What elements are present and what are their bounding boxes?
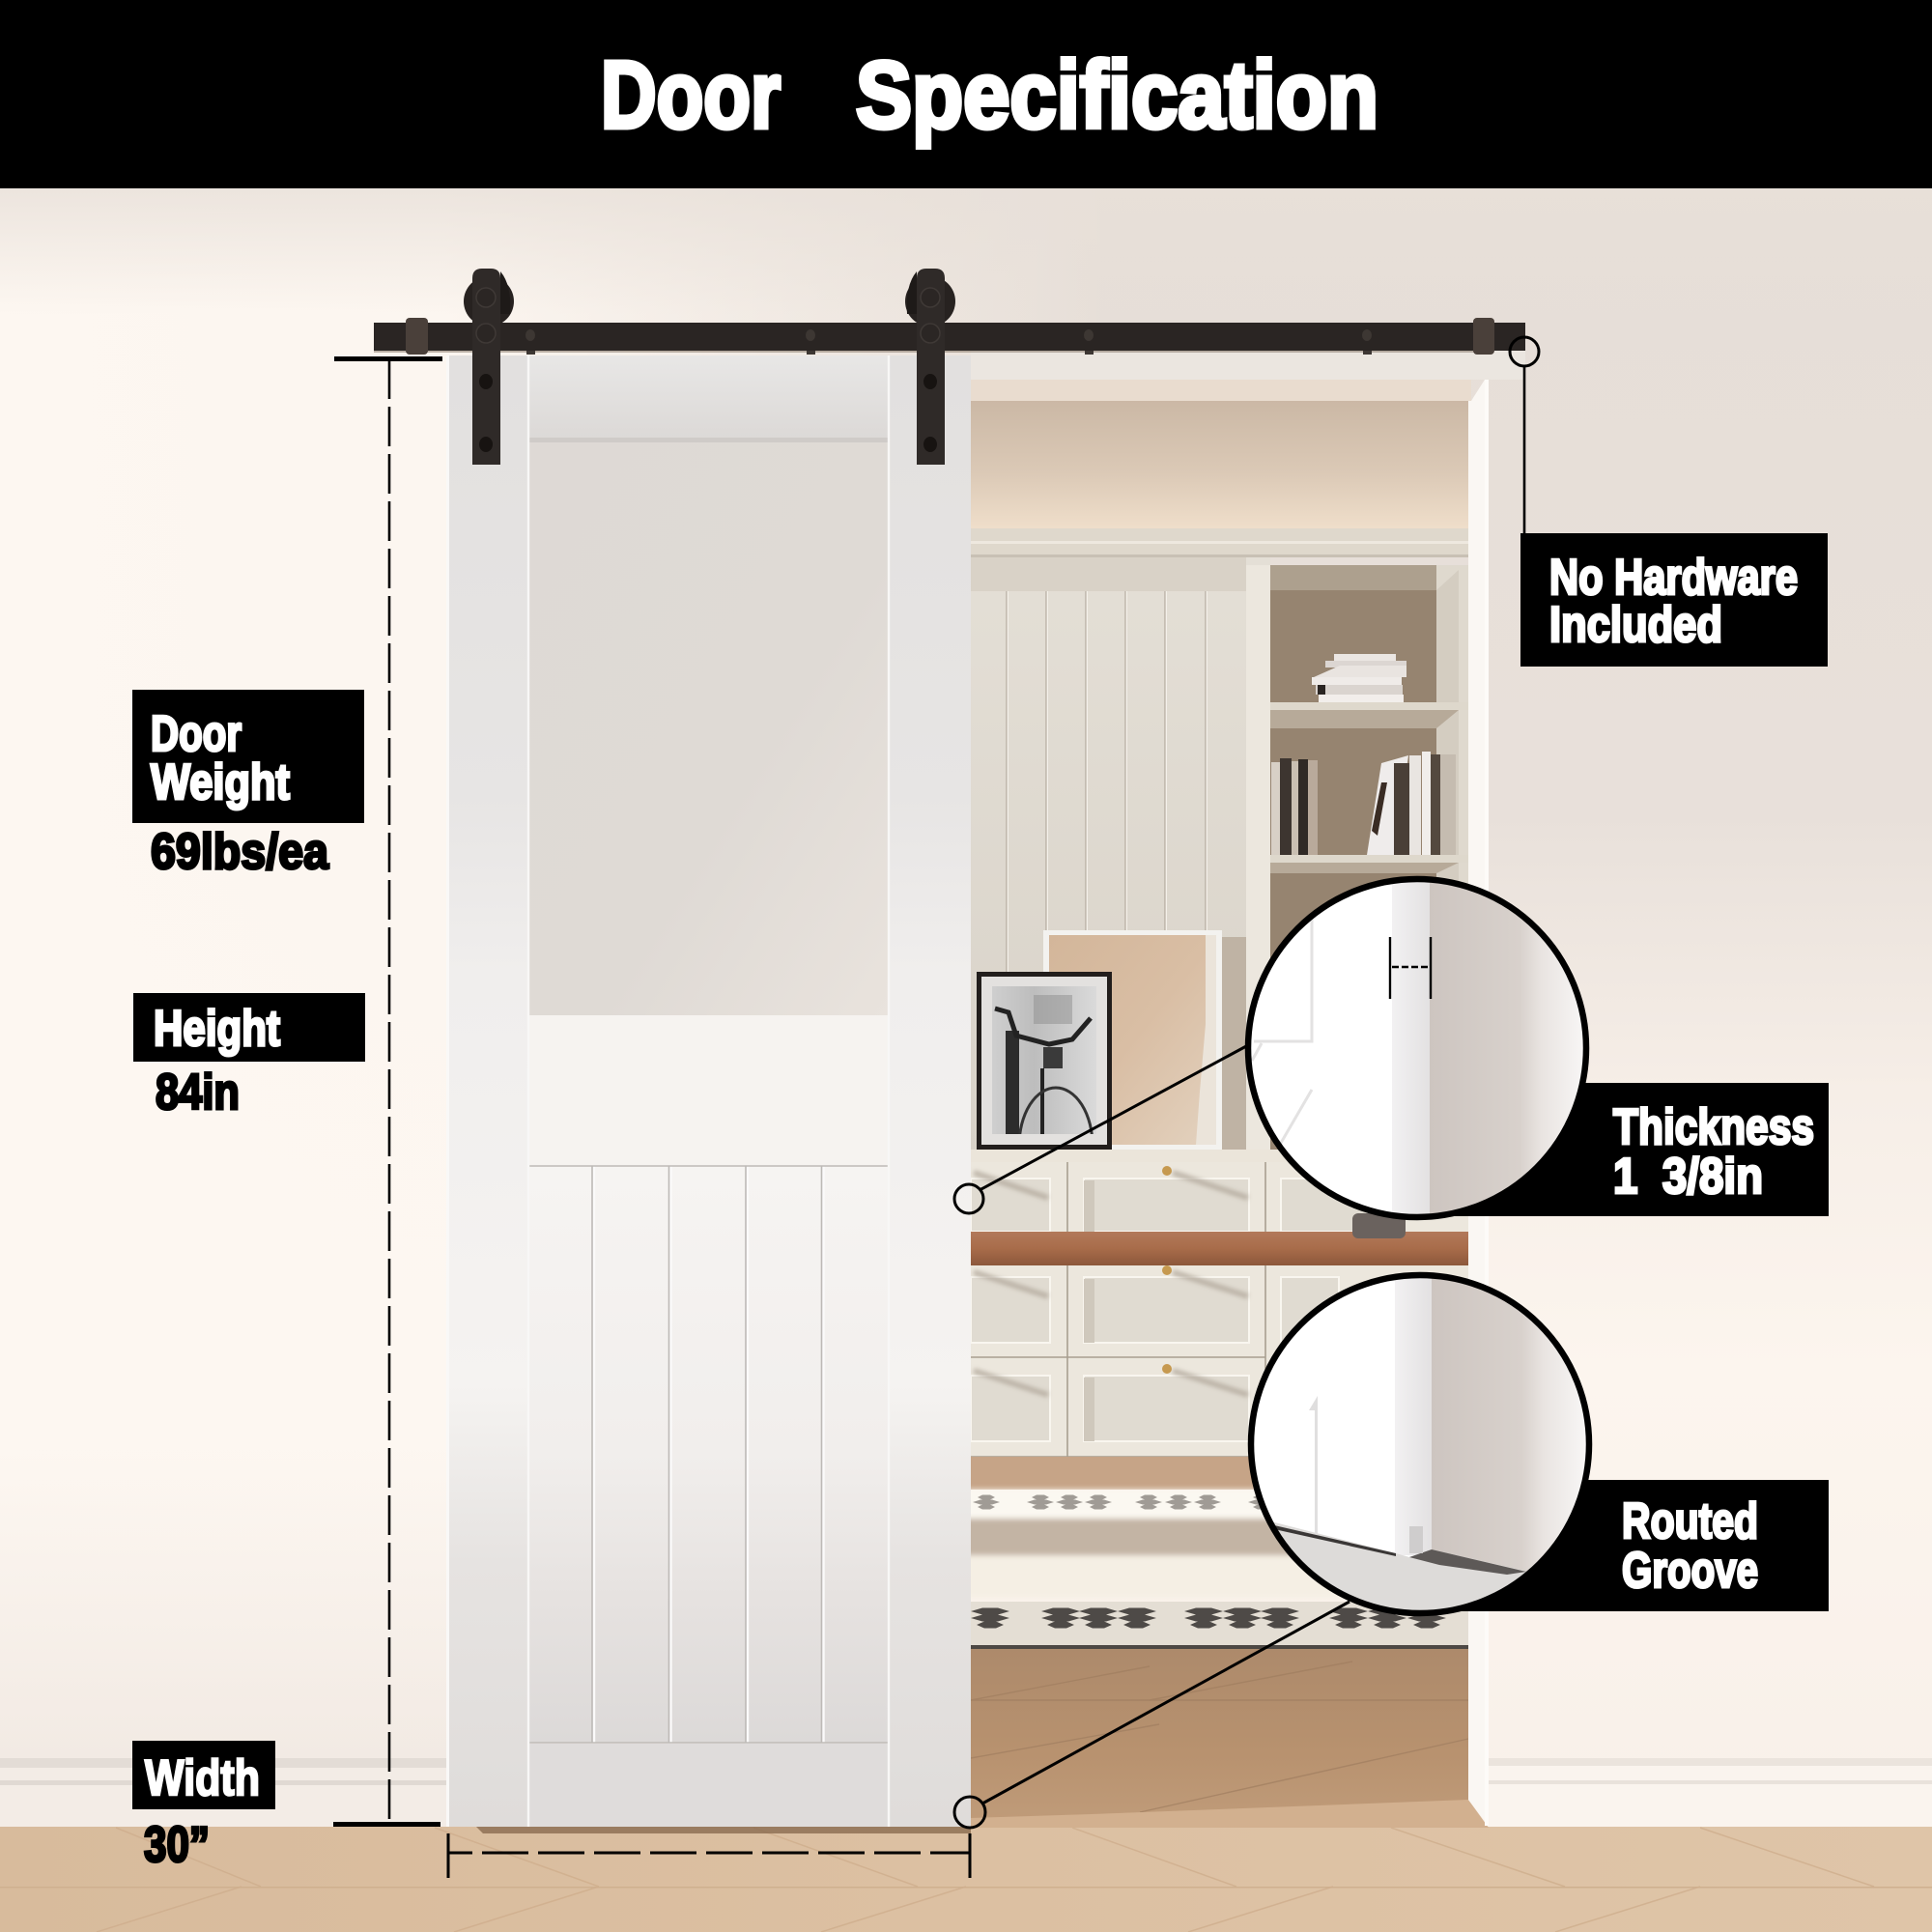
crown molding bbox=[971, 528, 1468, 557]
wooden shelf bbox=[971, 1213, 1468, 1265]
end stops bbox=[406, 318, 1494, 355]
no hardware label box bbox=[1520, 533, 1828, 667]
cabinets bbox=[971, 1150, 1468, 1457]
routed groove label box bbox=[1449, 1480, 1829, 1611]
marker: thickness bbox=[954, 1184, 983, 1213]
thickness dimension marks bbox=[1390, 937, 1431, 999]
no hardware label box: No Hardware bbox=[1549, 550, 1798, 606]
shelf boards bbox=[1270, 702, 1468, 873]
gold knobs bbox=[1162, 1166, 1172, 1374]
width dimension line bbox=[448, 1833, 970, 1878]
books right bbox=[1367, 752, 1456, 855]
no hardware label box: Included bbox=[1549, 597, 1722, 653]
knob shadows bbox=[974, 1173, 1248, 1395]
track bolts bbox=[526, 329, 1372, 355]
height value: 84in bbox=[156, 1065, 240, 1121]
leader line to groove detail bbox=[982, 1602, 1350, 1804]
header bar bbox=[0, 0, 1932, 188]
book stack bbox=[1312, 654, 1406, 702]
floor bbox=[0, 1827, 1932, 1932]
ceiling and soffit bbox=[971, 380, 1471, 531]
bottom rail bbox=[528, 1744, 889, 1827]
door weight label box bbox=[132, 690, 364, 823]
baseboard bbox=[0, 1758, 1932, 1828]
wall above doorway bbox=[971, 351, 1525, 380]
small marker: hardware bbox=[1510, 337, 1539, 366]
thickness label box bbox=[1449, 1083, 1829, 1216]
height dimension line bbox=[333, 356, 442, 1827]
bookshelf bbox=[1270, 565, 1468, 1164]
detail circle: thickness bbox=[1248, 874, 1594, 1222]
detail circle: routed groove bbox=[1251, 1270, 1604, 1623]
door weight label box: Weight bbox=[151, 754, 290, 810]
upper panel bbox=[528, 438, 889, 1015]
beadboard wall panels bbox=[971, 557, 1270, 1166]
title: Door bbox=[601, 42, 781, 148]
height label box: Height bbox=[154, 1001, 280, 1057]
height label box bbox=[133, 993, 365, 1062]
leader line to thickness detail bbox=[980, 1045, 1248, 1190]
routed groove label box: Groove bbox=[1622, 1543, 1758, 1599]
barn door bbox=[446, 355, 971, 1827]
doorway interior room bbox=[961, 380, 1489, 1828]
thickness label box: Thickness bbox=[1613, 1099, 1814, 1155]
title: Specification bbox=[856, 42, 1378, 148]
width label box: Width bbox=[145, 1750, 260, 1806]
left hanger bbox=[464, 269, 514, 465]
door weight label box: Door bbox=[151, 706, 242, 762]
right hanger bbox=[905, 269, 955, 465]
door stiles bbox=[446, 355, 971, 1827]
top rail bbox=[528, 355, 889, 438]
middle rail bbox=[528, 1015, 889, 1165]
black framed bicycle photo bbox=[977, 972, 1112, 1150]
beige art frame bbox=[1043, 930, 1246, 1150]
routed groove label box: Routed bbox=[1622, 1493, 1758, 1549]
books left bbox=[1271, 758, 1318, 855]
door frame casing bbox=[1468, 380, 1489, 1826]
marker: groove bbox=[954, 1797, 985, 1828]
leader line to hardware label bbox=[1523, 367, 1525, 534]
width value: 30” bbox=[144, 1817, 210, 1873]
sliding track rail bbox=[374, 318, 1525, 355]
title bbox=[601, 42, 1378, 148]
door weight value: 69lbs/ea bbox=[151, 824, 329, 880]
plank section bbox=[528, 1165, 889, 1743]
thickness label box: 1 3/8in bbox=[1613, 1149, 1763, 1205]
floor and rug bbox=[961, 1457, 1489, 1828]
